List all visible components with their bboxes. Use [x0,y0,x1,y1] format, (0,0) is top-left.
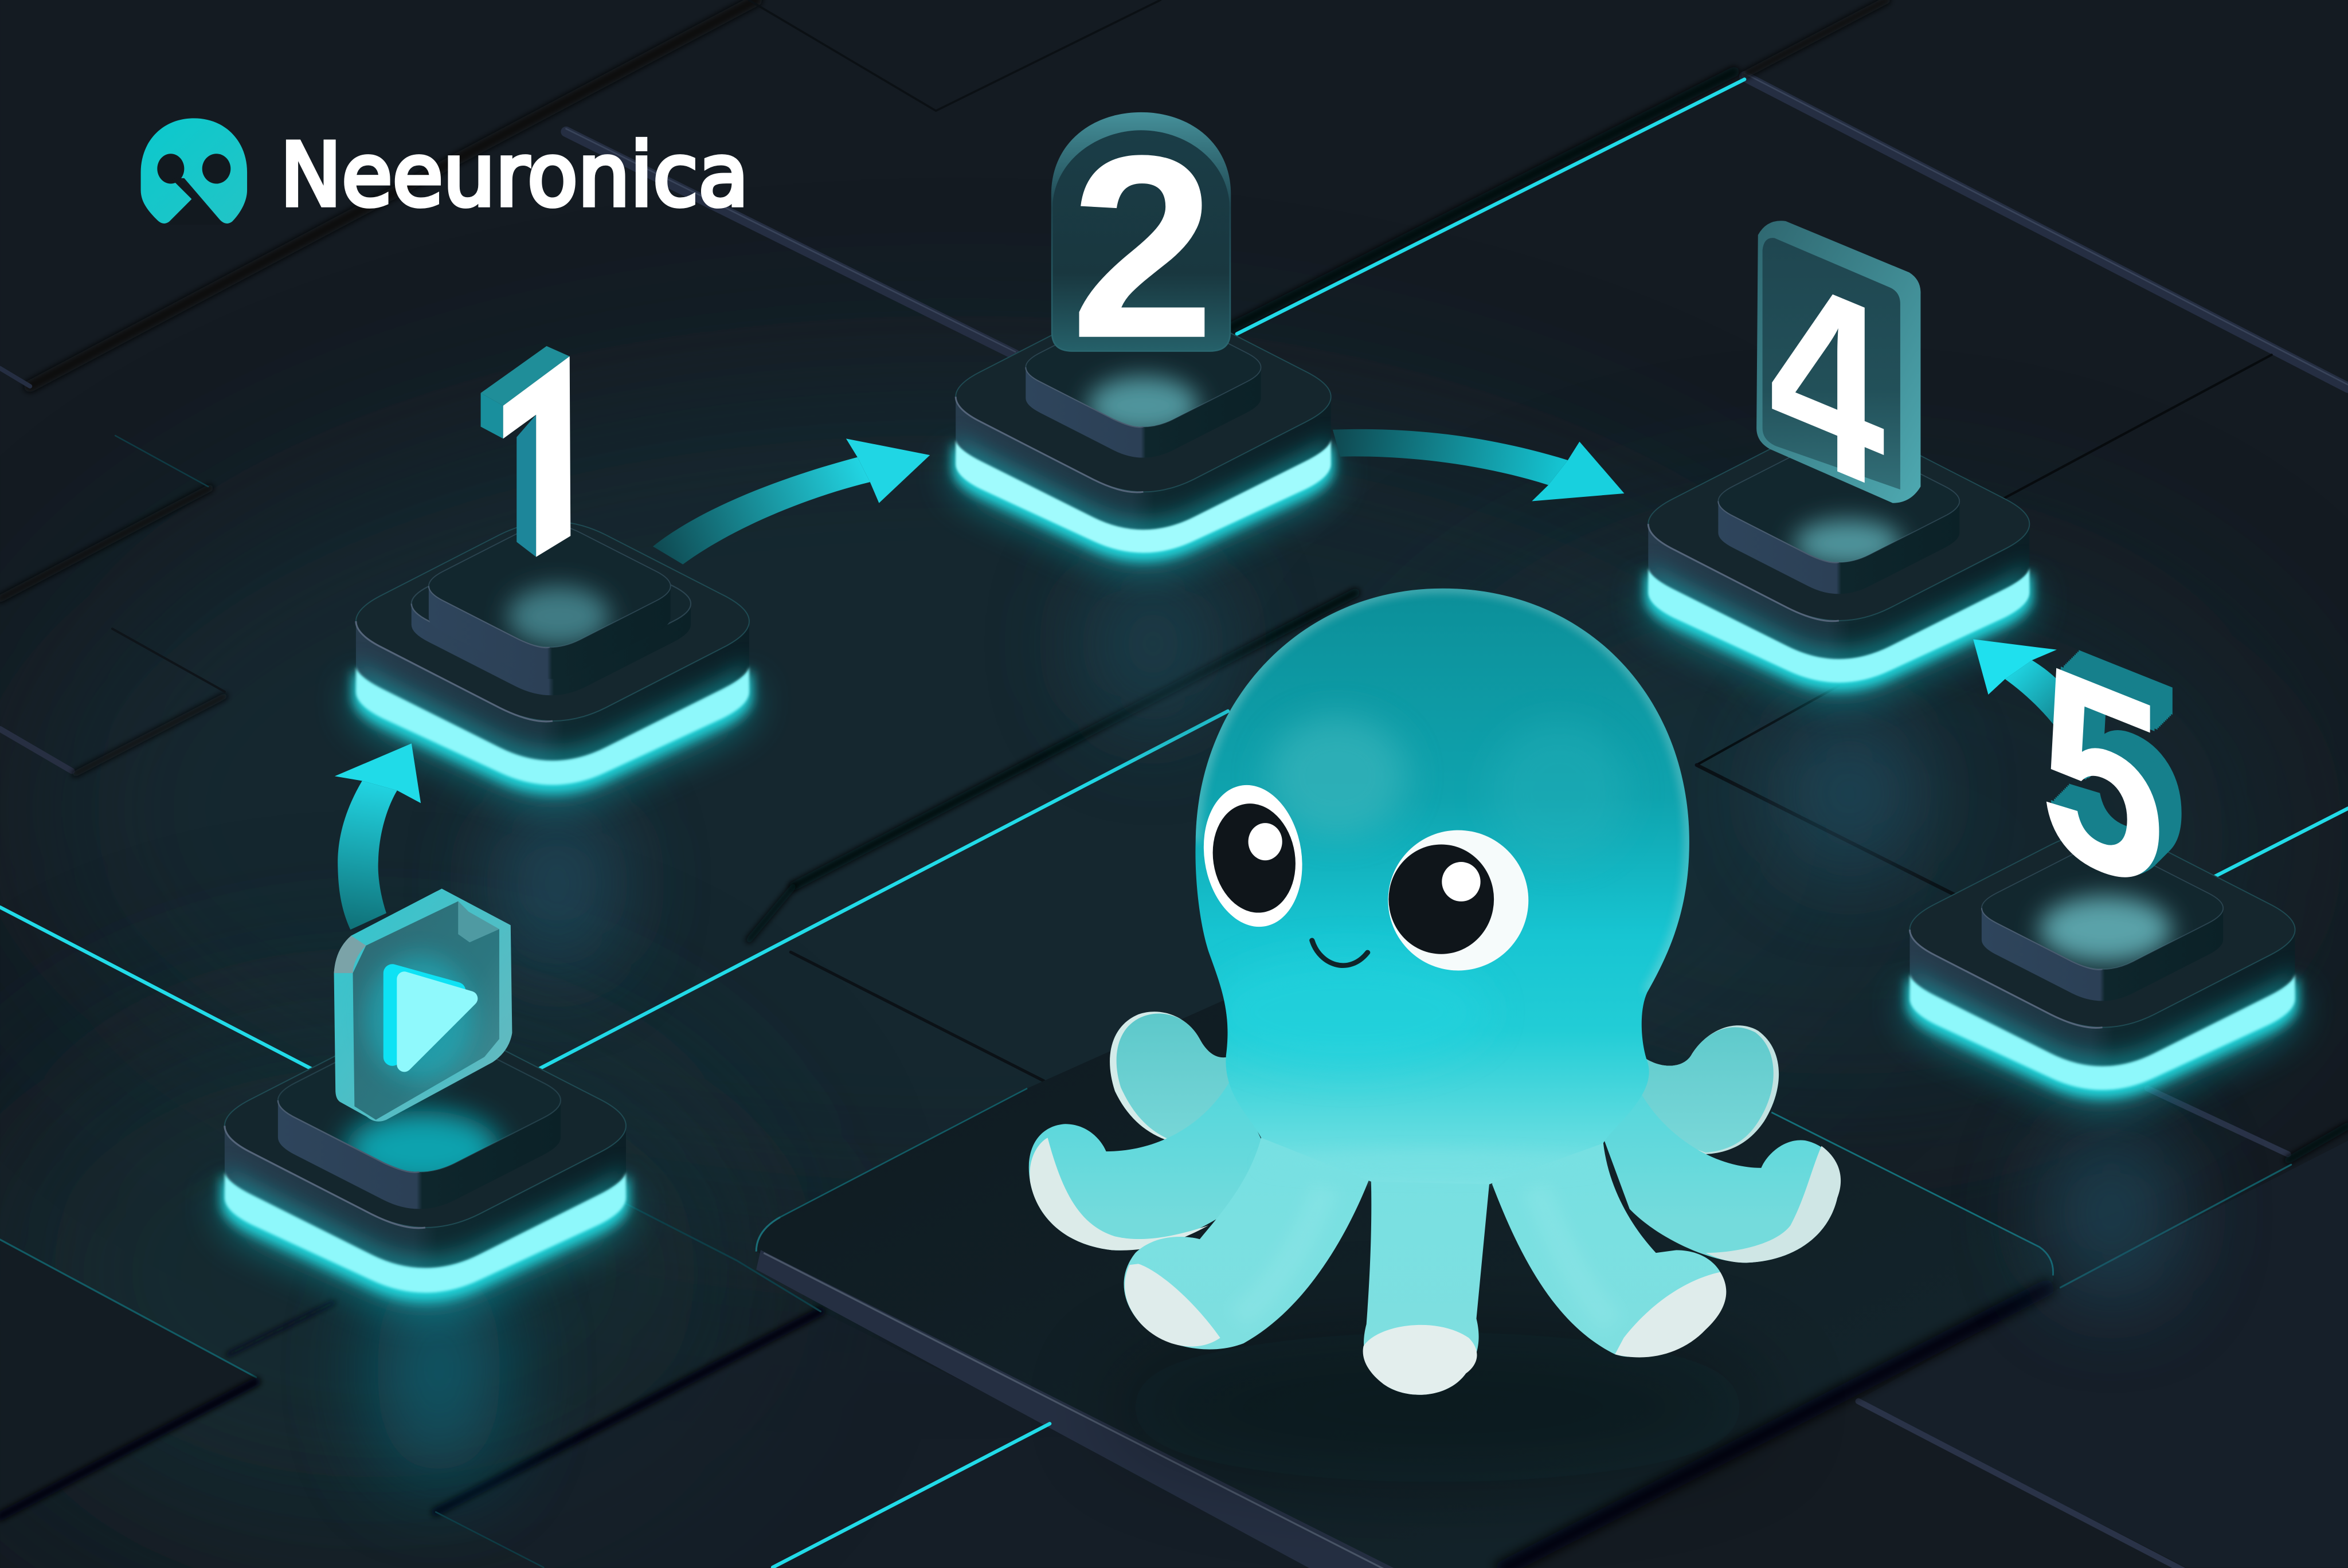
number 4 on glass card: 4 [1769,213,1886,546]
mid right arm [1603,1083,1841,1263]
icon: glass play card [334,889,512,1122]
number 5 extruded: 5 [2052,596,2177,944]
front right arm [1492,1122,1726,1357]
logo icon [141,118,247,225]
floor reflections [376,554,2179,1482]
arrow: step 2 to step 4 [1333,429,1624,501]
number 2 on glass card: 2 [1070,102,1215,393]
number 5 extruded: 5 [2044,602,2170,950]
number 5 extruded: 5 [2060,587,2186,935]
arrow: start to step 1 [335,743,421,930]
number 5 extruded: 5 [2040,603,2165,952]
number 5 extruded: 5 [2057,590,2183,938]
platform: step 4 [1648,428,2029,694]
center arm [1363,1122,1489,1395]
arrow: step 1 to step 2 [653,438,930,565]
platform: step 1 [356,522,749,797]
number 5 extruded: 5 [2062,586,2188,934]
wordmark: Neeuronica [280,124,749,226]
platform: step 5 [1910,832,2295,1101]
number 5 extruded: 5 [2053,595,2179,943]
number 5 extruded: 5 [2059,589,2185,937]
floor panels [0,1140,2348,1567]
platform: step 2 [956,301,1331,564]
number 5 extruded: 5 [2050,598,2176,946]
number 5 extruded: 5 [2056,591,2182,940]
smile [1312,940,1368,966]
number 5 extruded: 5 [2047,601,2173,949]
octopus mascot [1029,589,1841,1395]
head and body [1195,589,1689,1185]
platform: start [225,1024,626,1305]
mid left arm [1029,1077,1279,1251]
number 1: 1 [468,281,610,650]
back arms [1110,1012,1779,1154]
arrow: step 5 to step 4 [1973,639,2060,734]
number 5 extruded: 5 [2054,593,2181,941]
number 5 extruded: 5 [2048,599,2174,947]
icon: play triangle [365,955,473,1081]
central raised plate [756,958,2053,1568]
logo [141,118,749,226]
left eye [1194,779,1312,933]
front left arm [1124,1110,1369,1349]
right eye [1388,830,1528,970]
